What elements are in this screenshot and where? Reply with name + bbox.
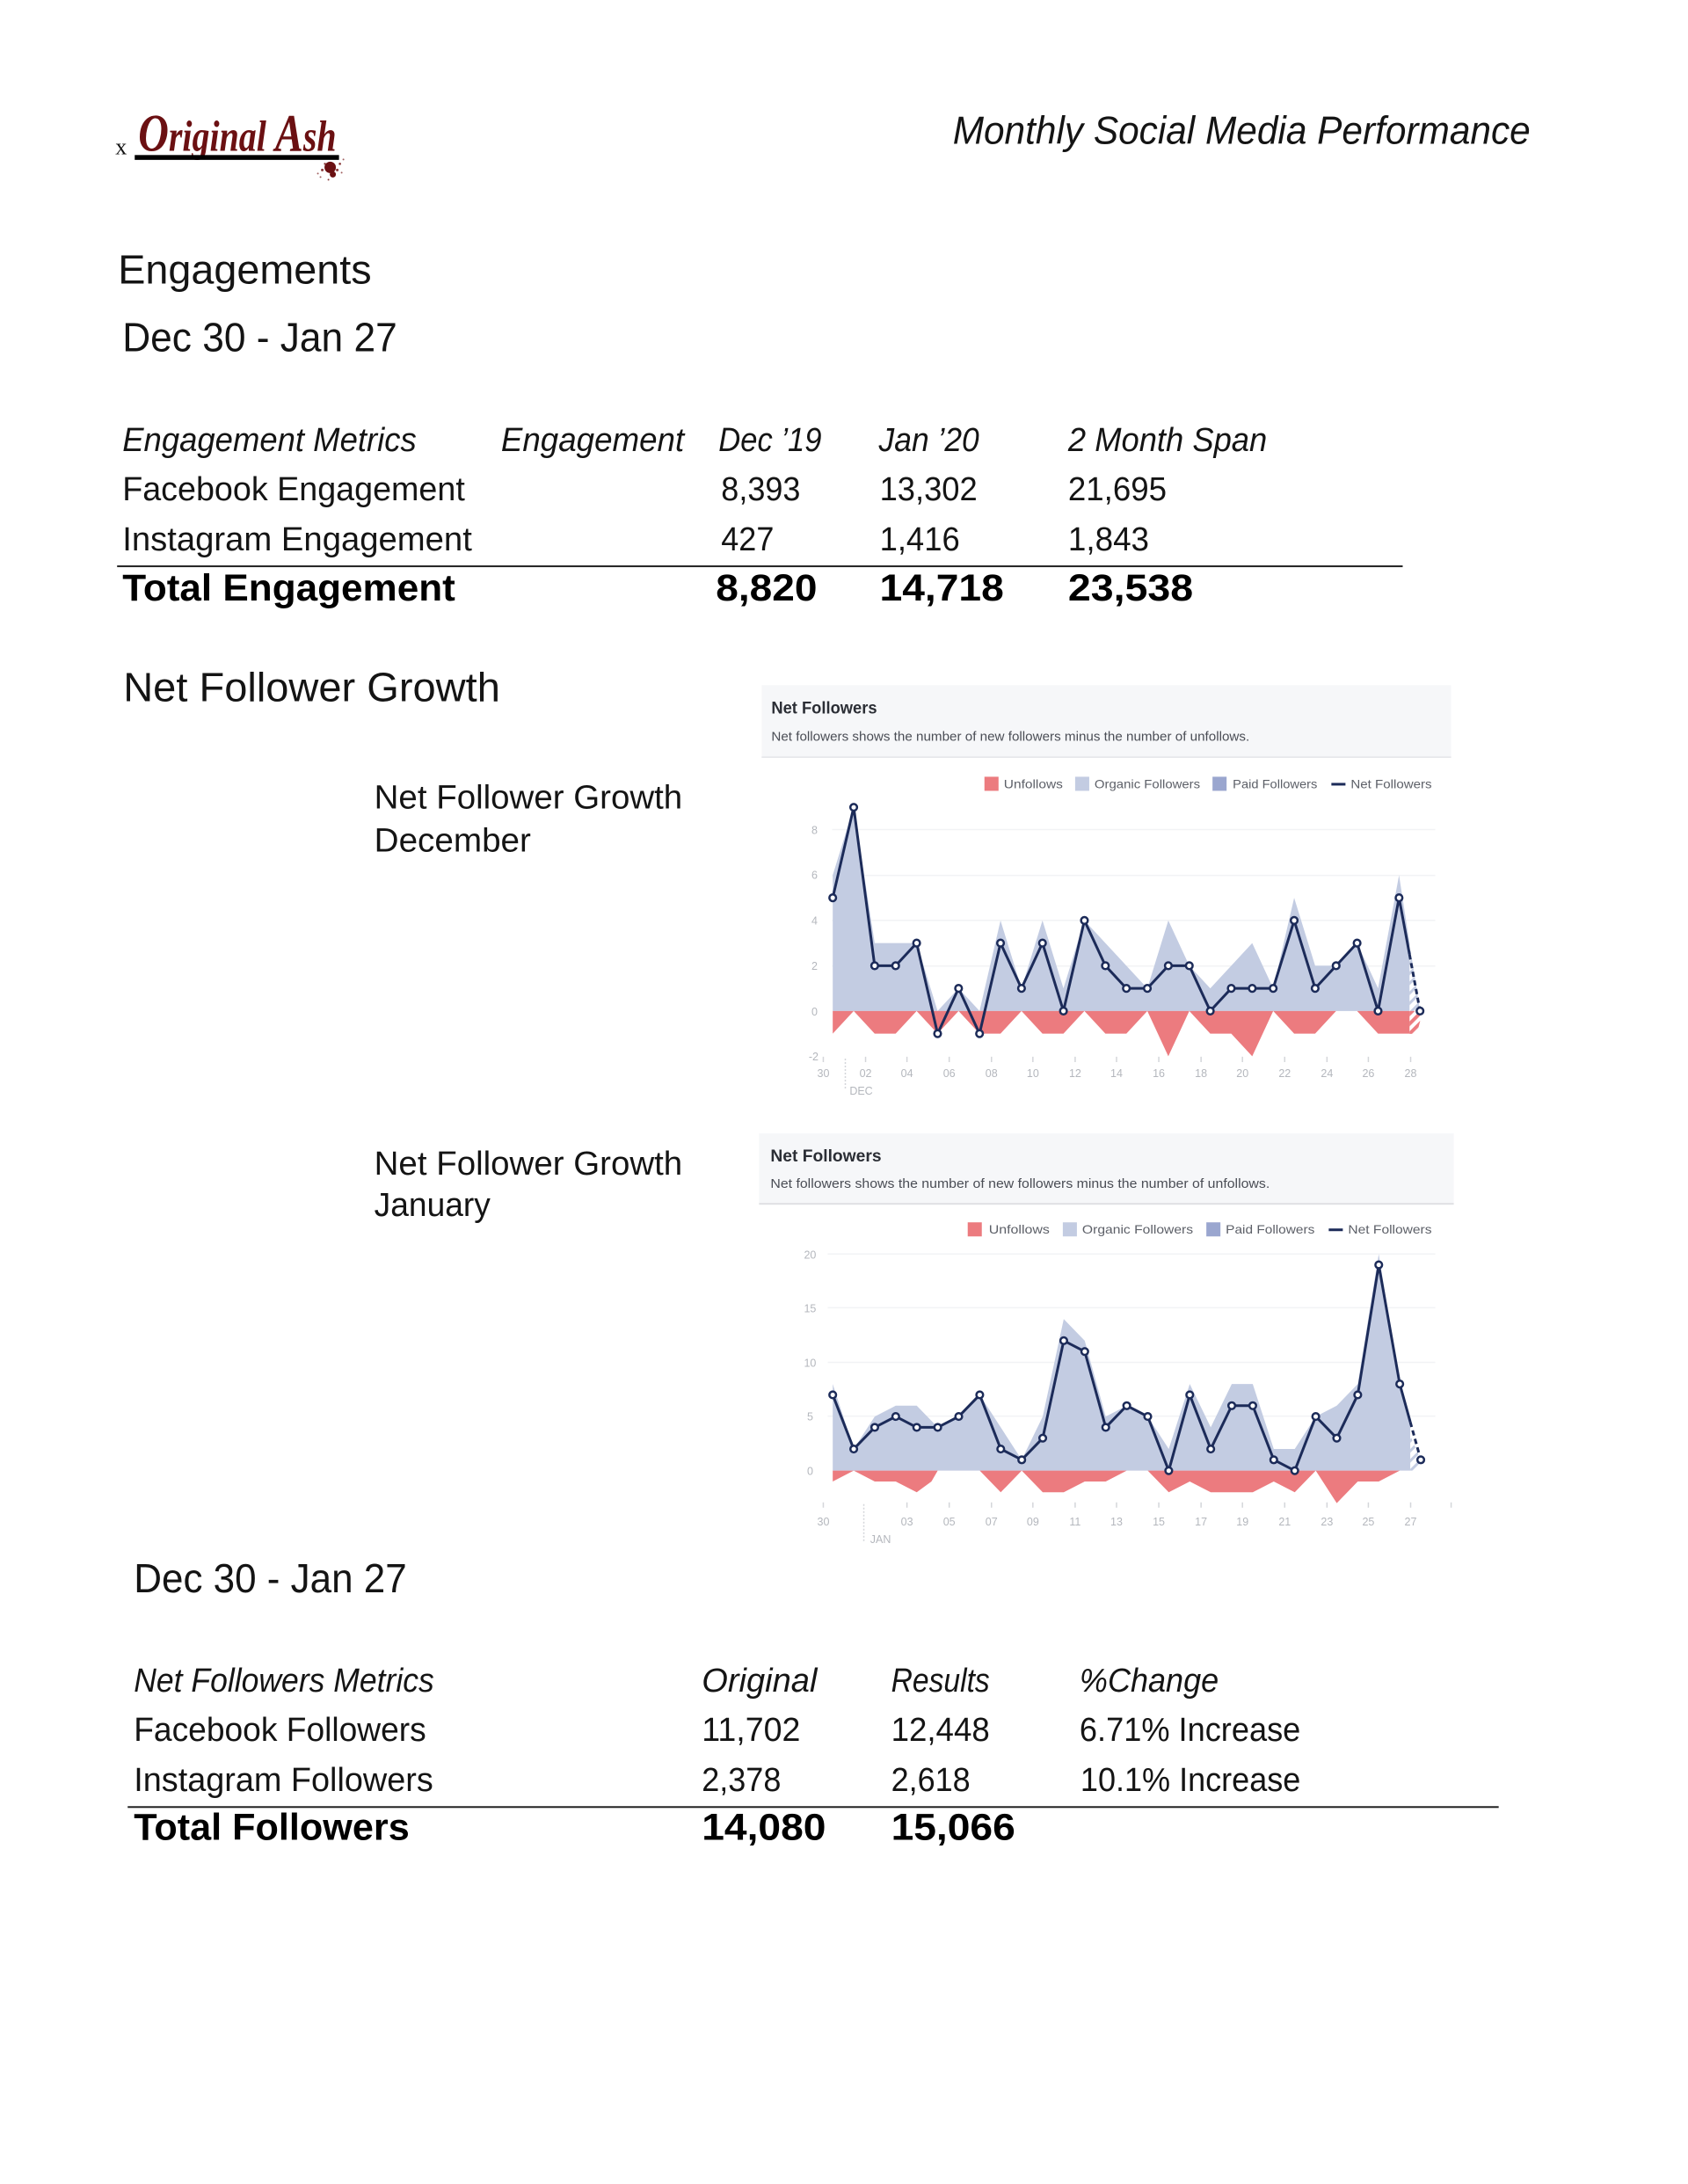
table: engagement metrics: 23,538: [1068, 567, 1193, 609]
hatched forecast area: January: [1410, 1436, 1421, 1471]
x axis: December: 24: [1321, 1067, 1333, 1080]
x axis: December: [818, 1057, 1417, 1097]
y axis: December: 4: [811, 915, 818, 928]
legend: January: Net Followers: [1348, 1222, 1432, 1236]
table: net followers metrics: Results: [891, 1663, 990, 1700]
table: engagement metrics: 2 Month Span: [1067, 422, 1267, 459]
table: net followers metrics: %Change: [1080, 1663, 1219, 1700]
x axis: December: 18: [1195, 1067, 1207, 1080]
heading: Net Follower Growth: Net Follower Growth: [123, 664, 500, 710]
table: net followers metrics: 15,066: [891, 1806, 1015, 1848]
logo: Original Ash: [115, 103, 345, 180]
x axis: January: 11: [1069, 1516, 1080, 1528]
table: net followers metrics: 12,448: [891, 1712, 990, 1749]
y axis: January: 5: [807, 1411, 813, 1423]
y axis: January: 20: [804, 1249, 816, 1261]
chart header: January: [759, 1133, 1454, 1205]
legend: December: Net Followers: [1350, 776, 1432, 790]
table: engagement metrics: 13,302: [880, 471, 978, 508]
x axis: January: 15: [1153, 1516, 1165, 1528]
table: engagement metrics: 427: [721, 521, 774, 558]
legend: December: Unfollows: [1004, 776, 1063, 790]
x axis: December: 06: [943, 1067, 956, 1080]
heading: Engagements: Engagements: [118, 247, 372, 293]
table: engagement metrics: Facebook Engagement: [122, 471, 465, 508]
x axis: January: JAN: [870, 1533, 891, 1546]
table: engagement metrics: [117, 422, 1402, 609]
table: net followers metrics: 11,702: [702, 1712, 800, 1749]
logo: Original Ash: x: [115, 134, 127, 159]
y axis: December: [809, 825, 819, 1063]
x axis: December: 12: [1069, 1067, 1081, 1080]
x axis: December: 14: [1110, 1067, 1123, 1080]
table: engagement metrics: 8,393: [721, 471, 800, 508]
label: Net Follower Growth December: December: [375, 823, 531, 860]
chart header: January: Net followers shows the number of new followers minus the number of unfollows.: [770, 1177, 1270, 1191]
x axis: January: 07: [986, 1516, 998, 1528]
table: net followers metrics: Net Followers Metrics: [134, 1663, 434, 1700]
label: Net Follower Growth January: [375, 1146, 682, 1224]
x axis: December: DEC: [849, 1085, 873, 1097]
table: engagement metrics: 8,820: [716, 567, 817, 609]
x axis: December: 22: [1278, 1067, 1291, 1080]
x axis: January: 23: [1321, 1516, 1333, 1528]
legend: January: Paid Followers: [1226, 1222, 1314, 1236]
x axis: December: 28: [1405, 1067, 1417, 1080]
table: engagement metrics: Jan ’20: [878, 422, 979, 459]
table: net followers metrics: Original: [702, 1663, 819, 1700]
legend: January: Unfollows: [989, 1222, 1050, 1236]
x axis: December: 16: [1153, 1067, 1165, 1080]
legend: December: [985, 776, 1432, 790]
y axis: December: -2: [809, 1051, 819, 1063]
net followers line: January: [829, 1262, 1424, 1474]
x axis: January: 19: [1236, 1516, 1248, 1528]
chart header: December: Net followers shows the number of new followers minus the number of unfollows.: [771, 730, 1249, 744]
chart header: January: Net Followers: [770, 1147, 882, 1166]
chart: net followers January: [759, 1133, 1454, 1546]
table: engagement metrics: 1,416: [880, 521, 960, 558]
table: net followers metrics: 10.1% Increase: [1080, 1762, 1300, 1799]
legend: December: Organic Followers: [1095, 776, 1200, 790]
x axis: January: 03: [901, 1516, 913, 1528]
x axis: January: 21: [1278, 1516, 1291, 1528]
area series: December: [833, 807, 1409, 1056]
label: Net Follower Growth December: [375, 779, 682, 860]
hatched forecast areas: December: [1409, 943, 1420, 1034]
x axis: December: 04: [901, 1067, 913, 1080]
table: net followers metrics: Instagram Followers: [134, 1762, 433, 1799]
x axis: January: 30: [818, 1516, 829, 1528]
x axis: January: 05: [943, 1516, 956, 1528]
y axis: December: 0: [811, 1006, 818, 1018]
table: engagement metrics: 21,695: [1068, 471, 1167, 508]
legend: December: Paid Followers: [1233, 776, 1317, 790]
legend: January: [968, 1222, 1432, 1236]
x axis: December: 26: [1362, 1067, 1374, 1080]
label: Net Follower Growth January: Net Follower Growth: [375, 1146, 682, 1183]
table: net followers metrics: Total Followers: [134, 1806, 410, 1848]
legend: January: Organic Followers: [1082, 1222, 1193, 1236]
table: net followers metrics: 6.71% Increase: [1080, 1712, 1300, 1749]
y axis: January: 15: [804, 1302, 816, 1314]
label: Net Follower Growth January: January: [375, 1187, 491, 1224]
table: engagement metrics: 14,718: [880, 567, 1004, 609]
x axis: January: 09: [1027, 1516, 1039, 1528]
area series: January: [833, 1254, 1410, 1503]
y axis: December: 2: [811, 960, 818, 972]
x axis: January: 13: [1110, 1516, 1123, 1528]
x axis: January: 17: [1195, 1516, 1207, 1528]
x axis: December: 20: [1236, 1067, 1248, 1080]
net followers line: December: [829, 804, 1423, 1037]
date range: engagements: Dec 30 - Jan 27: [122, 315, 397, 360]
chart header: December: Net Followers: [771, 699, 877, 717]
x axis: December: 02: [860, 1067, 872, 1080]
x axis: January: [818, 1503, 1452, 1546]
y axis: January: [804, 1249, 816, 1478]
table: engagement metrics: 1,843: [1068, 521, 1149, 558]
table: net followers metrics: [127, 1663, 1499, 1848]
table: engagement metrics: Dec ’19: [718, 422, 821, 459]
label: Net Follower Growth December: Net Follower Growth: [375, 779, 682, 816]
x axis: December: 10: [1027, 1067, 1039, 1080]
table: engagement metrics: Engagement Metrics: [122, 422, 417, 459]
table: engagement metrics: Total Engagement: [122, 567, 455, 609]
title: Monthly Social Media Performance: [953, 109, 1531, 152]
chart: net followers December: [761, 685, 1452, 1097]
date range: followers: Dec 30 - Jan 27: [134, 1555, 407, 1601]
table: net followers metrics: 14,080: [702, 1806, 826, 1848]
chart header: December: [761, 685, 1452, 758]
y axis: December: 6: [811, 870, 818, 882]
table: net followers metrics: 2,618: [891, 1762, 971, 1799]
table: engagement metrics: Instagram Engagement: [122, 521, 472, 558]
x axis: December: 30: [818, 1067, 829, 1080]
table: engagement metrics: Engagement: [501, 422, 686, 459]
y axis: January: 0: [807, 1466, 813, 1478]
table: net followers metrics: Facebook Followers: [134, 1712, 426, 1749]
x axis: January: 27: [1405, 1516, 1417, 1528]
x axis: December: 08: [986, 1067, 998, 1080]
x axis: January: 25: [1362, 1516, 1374, 1528]
table: net followers metrics: 2,378: [702, 1762, 781, 1799]
logo: Original Ash: Original Ash: [138, 103, 337, 162]
y axis: January: 10: [804, 1357, 816, 1369]
y axis: December: 8: [811, 825, 818, 837]
